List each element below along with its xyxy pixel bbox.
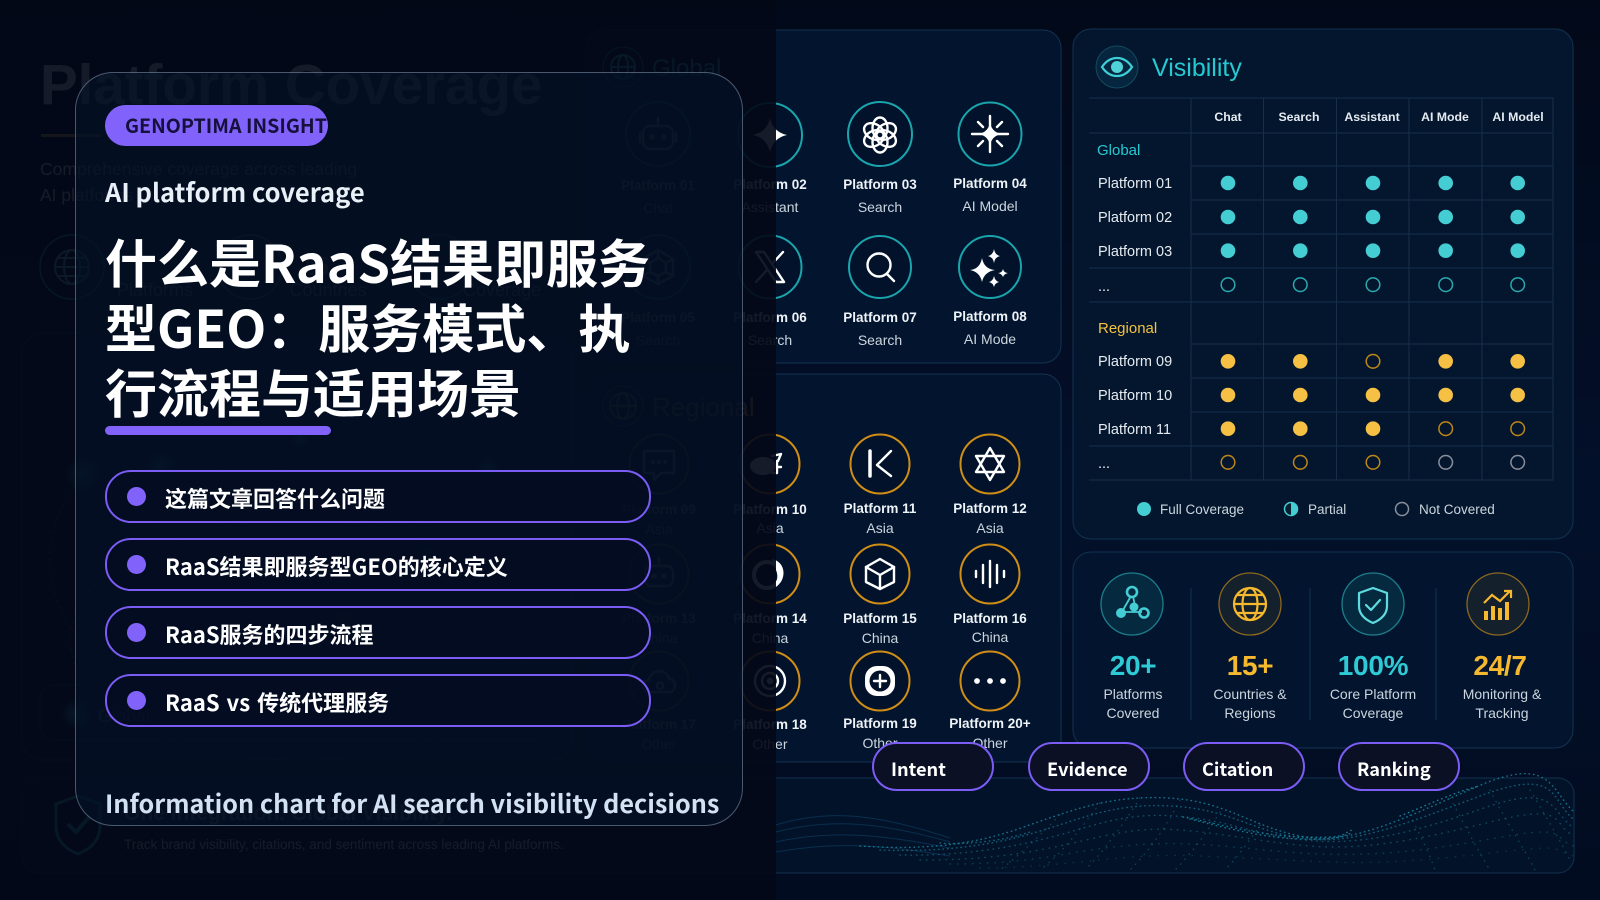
ghost integration text: Track brand visibility, citations, and sentiment across leading AI platforms. [124,837,564,852]
platform 05 [621,235,695,348]
platform 02: Platform 02 [733,177,807,192]
platform 08 [953,236,1027,347]
stat: countries: 15+ [1227,650,1273,681]
platform 11: Platform 11 [844,501,917,516]
legend [1137,502,1495,517]
platform 10: Platform 10 [733,502,807,517]
row labels: regional: ... [1098,456,1110,472]
ghost map panel: Global [98,706,150,726]
ghost accent line [41,134,101,137]
platform 05: Search [636,332,680,348]
platform 19 [843,652,917,751]
platform 02: Assistant [742,199,799,215]
platform 01: Platform 01 [621,178,695,193]
stat: platforms: Covered [1107,705,1159,721]
tag: Ranking [1338,742,1460,791]
table grid [1089,98,1553,480]
platform 12: Asia [976,520,1004,536]
platform 08: Platform 08 [953,309,1027,324]
platform 18 [733,652,807,752]
stat: countries: Countries & [1213,686,1287,702]
badge: GENOPTIMA INSIGHT [105,105,328,146]
panel: integration wave [22,774,1574,873]
row labels: global: Platform 01 [1098,176,1172,192]
platform 13: China [641,630,677,646]
list item 3 [105,606,651,659]
platform 03 [843,102,917,215]
stat: platforms: 20+ [1110,650,1156,681]
ghost integration heading: One Integration. Global Visibility. [124,802,452,825]
ghost global header [603,47,721,87]
row labels: regional: Platform 10 [1098,388,1172,404]
row labels: global: ... [1098,279,1110,295]
panel: regional platforms [586,374,1061,762]
heading: Visibility: Visibility [1152,54,1242,82]
table header: AI Model [1492,110,1544,124]
table header: Assistant [1344,110,1400,124]
platform 20+: Other [972,735,1008,751]
platform 17: Platform 17 [622,717,696,732]
platform 04: Platform 04 [953,176,1027,191]
platform 07: Platform 07 [843,310,917,325]
row labels: global [1097,142,1172,295]
platform 10 [733,434,807,536]
tag: Intent: Intent [891,756,946,782]
row labels: global: Platform 02 [1098,210,1172,226]
ghost subtitle [40,159,357,205]
stat: coverage: 100% [1338,650,1409,681]
stat: coverage: Core Platform [1330,686,1416,702]
platform 17: Other [641,736,677,752]
row labels: global: Global [1097,142,1140,159]
title [105,223,650,428]
table header: AI Mode [1421,110,1469,124]
icon: eye [1096,46,1138,88]
platform 11 [844,434,917,536]
ghost regional header [603,386,755,426]
ghost stats row: Coverage [463,280,541,300]
platform 16 [953,544,1027,645]
row labels: regional: Regional [1098,320,1157,337]
platform 01 [621,102,695,216]
platform 12 [953,434,1027,536]
panel: visibility matrix [1073,29,1573,539]
title underline [105,426,331,435]
ghost global header: Global [652,55,721,82]
stat: coverage [1330,573,1416,721]
tag: Intent [872,742,994,791]
ghost subtitle: AI platforms [40,185,134,205]
platform 04 [953,102,1027,214]
stat: platforms: Platforms [1103,686,1163,702]
platform 19: Platform 19 [843,716,917,731]
stat: monitoring: Tracking [1475,705,1529,721]
platform 07: Search [858,332,902,348]
platform 13 [622,544,696,646]
platform 07 [843,236,917,348]
table header: Chat [1214,110,1242,124]
list item 2 [105,538,651,591]
card: article summary [75,72,743,826]
tag: Ranking: Ranking [1357,756,1431,782]
row labels: regional: Platform 09 [1098,354,1172,370]
platform 20+: Platform 20+ [949,716,1031,731]
table header: Search [1278,110,1320,124]
stat: platforms [1101,573,1163,721]
stat: monitoring: 24/7 [1473,650,1527,681]
platform 09 [622,434,696,537]
platform 13: Platform 13 [622,611,696,626]
platform 06: Platform 06 [733,310,807,325]
legend: Partial [1308,502,1346,517]
list item 3: RaaS服务的四步流程 [165,618,374,650]
platform 14 [733,544,807,646]
legend: Full Coverage [1160,502,1244,517]
tag: Evidence [1028,742,1150,791]
platform 15 [843,544,917,646]
badge: GENOPTIMA INSIGHT: GENOPTIMA INSIGHT [125,110,327,139]
platform 16: China [972,629,1008,645]
platform 09: Platform 09 [622,502,696,517]
platform 12: Platform 12 [953,501,1027,516]
platform 15: China [862,630,898,646]
ghost regional header: Regional [652,392,755,422]
title: 型GEO：服务模式、执 [105,288,630,363]
list item 1 [105,470,651,523]
legend: Not Covered [1419,502,1495,517]
platform 02 [733,103,807,215]
title: 什么是RaaS结果即服务 [105,223,650,298]
platform 03: Platform 03 [843,177,917,192]
platform 11: Asia [866,520,894,536]
platform 01: Chat [643,200,673,216]
tag: Evidence: Evidence [1047,756,1128,782]
platform 03: Search [858,199,902,215]
list item 4: RaaS vs 传统代理服务 [165,686,389,718]
platform 19: Other [862,735,898,751]
platform 04: AI Model [962,198,1018,214]
platform 06 [733,236,807,348]
ghost subtitle: Comprehensive coverage across leading [40,159,357,179]
platform 16: Platform 16 [953,611,1027,626]
subtitle: AI platform coverage [105,173,365,210]
ghost stats row: 15 [300,251,329,281]
platform 18: Other [752,736,788,752]
panel: key stats [1073,552,1573,748]
platform 09: Asia [645,521,673,537]
row labels: regional: Platform 11 [1098,422,1171,438]
platform 05: Platform 05 [621,310,695,325]
list item 1: 这篇文章回答什么问题 [165,482,385,514]
stat: countries: Regions [1224,705,1276,721]
platform 17 [622,652,696,752]
panel: global platforms [586,30,1061,363]
stat: monitoring [1463,573,1542,721]
stat: coverage: Coverage [1343,705,1404,721]
platform 06: Search [748,332,792,348]
table header [1214,110,1544,124]
platform 14: China [752,630,788,646]
list item 4 [105,674,651,727]
regional coverage dots [1221,354,1525,469]
platform 18: Platform 18 [733,717,807,732]
list item 2: RaaS结果即服务型GEO的核心定义 [165,550,508,582]
ghost shield icon [56,796,100,854]
row labels: regional [1098,320,1172,472]
platform 14: Platform 14 [733,611,807,626]
ghost stats row: Countries [289,280,367,300]
ghost stats row: Platforms [117,280,193,300]
ghost stats row [40,235,541,300]
platform 08: AI Mode [964,331,1016,347]
platform 15: Platform 15 [843,611,917,626]
tag: Citation [1183,742,1305,791]
title: 行流程与适用场景 [105,353,521,428]
ghost map panel [22,333,572,760]
row labels: global: Platform 03 [1098,244,1172,260]
ghost heading: Platform Coverage: Platform Coverage [40,53,542,116]
wave: dotted particle surface [776,774,1574,870]
dark overlay band [0,0,776,900]
tag: Citation: Citation [1202,756,1273,782]
global coverage dots [1221,176,1525,292]
stat: monitoring: Monitoring & [1463,686,1542,702]
footer caption: Information chart for AI search visibility decisions [105,785,719,821]
platform 20+ [949,652,1031,751]
stat: countries [1213,573,1287,721]
platform 10: Asia [756,520,784,536]
